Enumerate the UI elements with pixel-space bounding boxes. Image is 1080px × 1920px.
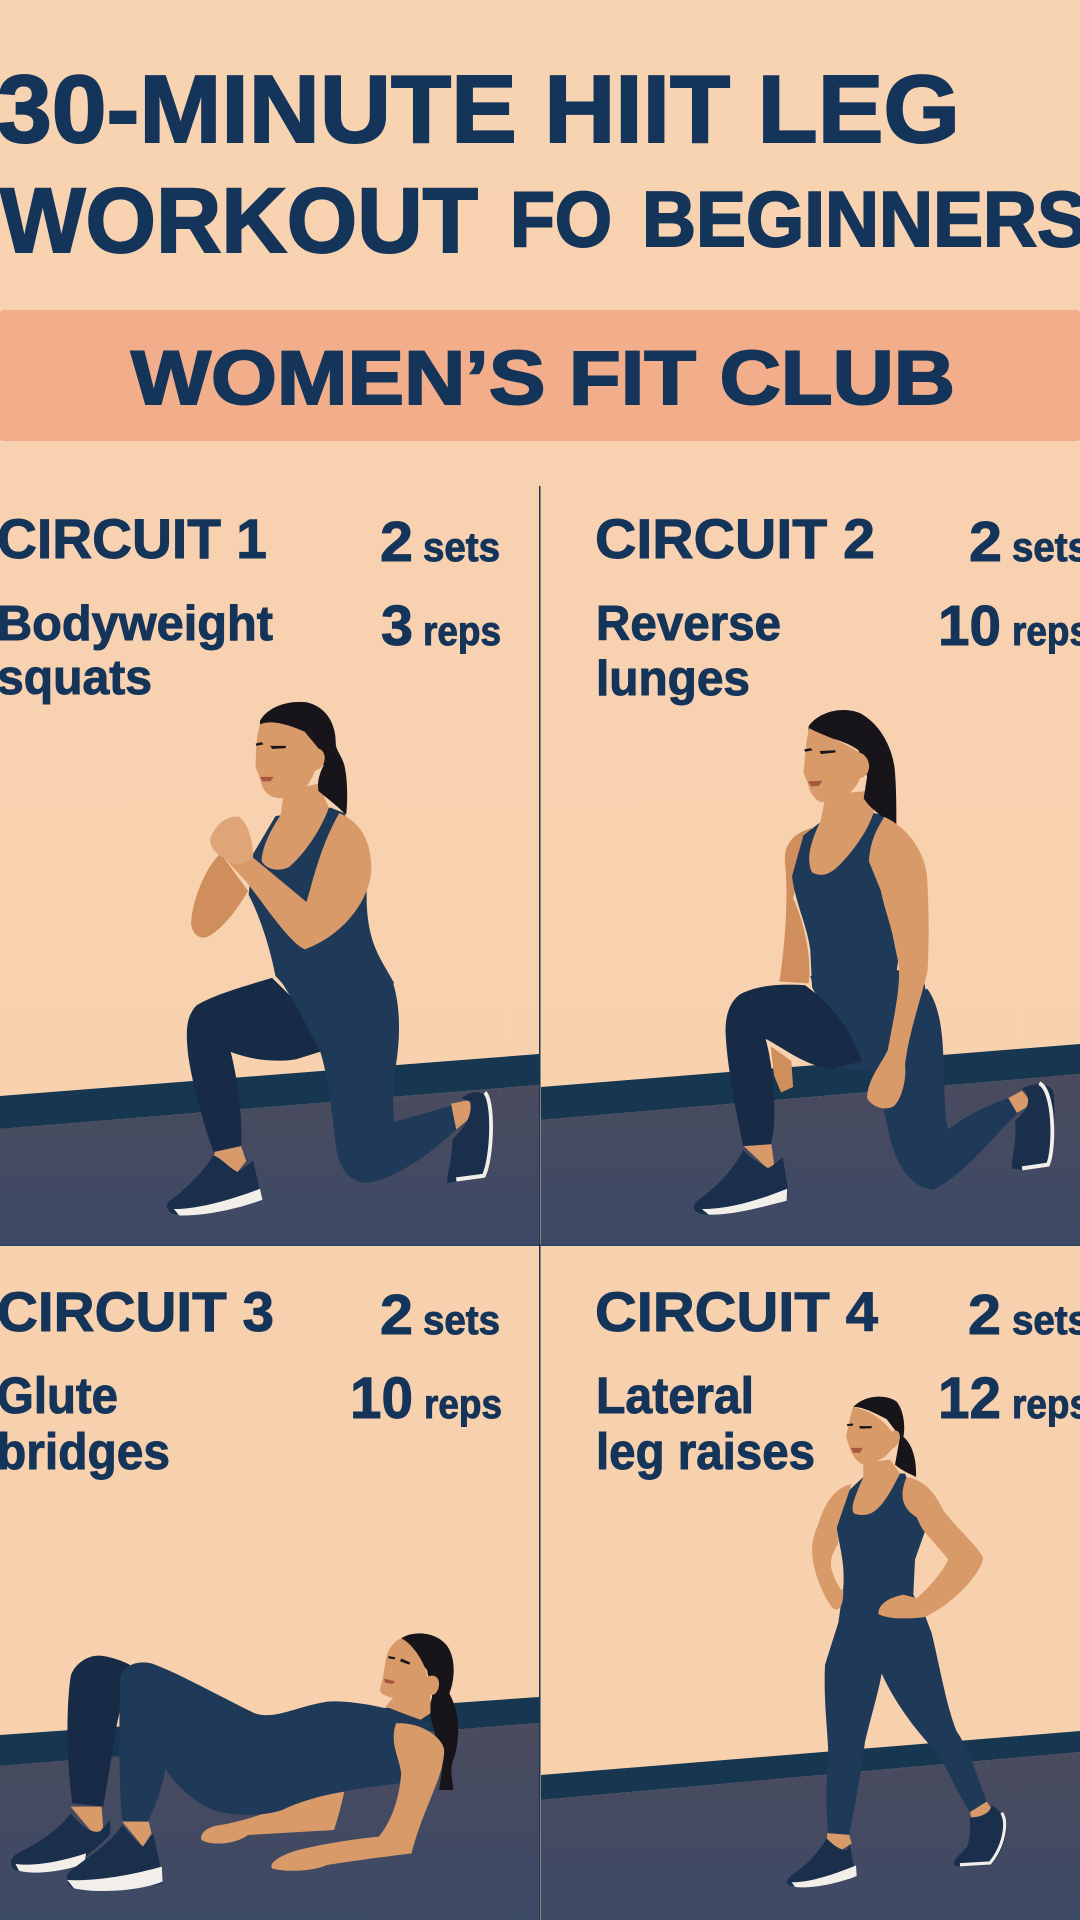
circuit 1 sets: 2 — [380, 510, 413, 574]
circuit 2 heading: CIRCUIT 2 — [595, 507, 875, 570]
circuit 1 reps: reps — [423, 608, 501, 654]
figure: lunge with clasped hands — [167, 702, 492, 1215]
figure: standing hands on hips — [787, 1397, 1007, 1887]
panel: circuit 1 — [0, 507, 539, 1245]
title: 30-MINUTE HIIT LEG — [0, 56, 960, 163]
panel: circuit 2 — [541, 507, 1080, 1245]
circuit 4 exercise name — [596, 1367, 815, 1480]
banner: Women's Fit Club — [0, 310, 1080, 441]
circuit 4 reps: 12 — [938, 1366, 1001, 1431]
circuit 3 exercise name — [0, 1367, 170, 1480]
circuit 1 exercise name: Bodyweight — [0, 597, 273, 651]
circuit 4 reps — [938, 1366, 1080, 1431]
circuit 3 exercise name: bridges — [0, 1423, 170, 1480]
figure: reverse lunge — [694, 710, 1055, 1215]
circuit 4 exercise name: leg raises — [596, 1423, 815, 1480]
figure: glute bridge — [11, 1633, 458, 1891]
panel: circuit 4 — [541, 1280, 1080, 1920]
circuit 4 sets — [968, 1283, 1080, 1347]
banner: Women's Fit Club: WOMEN’S FIT CLUB — [131, 336, 955, 421]
circuit 1 sets — [380, 510, 500, 574]
circuit 4 sets: 2 — [968, 1283, 1001, 1347]
circuit 3 exercise name: Glute — [0, 1367, 118, 1424]
circuit 3 sets: sets — [423, 1297, 500, 1343]
title: FO — [510, 175, 612, 263]
circuit 2 reps: 10 — [938, 594, 1001, 658]
circuit 2 reps — [938, 594, 1080, 658]
circuit 4 exercise name: Lateral — [596, 1367, 754, 1424]
circuit 3 sets — [380, 1283, 500, 1347]
title — [0, 56, 1080, 272]
circuit 2 sets: 2 — [969, 510, 1002, 574]
circuit 1 reps: 3 — [381, 594, 413, 658]
circuit 3 reps: 10 — [350, 1366, 413, 1431]
circuit 3 reps — [350, 1366, 502, 1431]
circuit 3 heading: CIRCUIT 3 — [0, 1280, 274, 1343]
title: WORKOUT — [0, 170, 478, 272]
circuit 3 reps: reps — [424, 1381, 502, 1427]
circuit 1 heading: CIRCUIT 1 — [0, 507, 267, 570]
circuit 2 exercise name: lunges — [596, 652, 750, 706]
circuit 4 heading: CIRCUIT 4 — [595, 1280, 878, 1343]
circuit 1 sets: sets — [423, 524, 500, 570]
panel: circuit 3 — [0, 1280, 539, 1920]
circuit 1 reps — [381, 594, 501, 658]
circuit 3 sets: 2 — [380, 1283, 413, 1347]
circuit 1 exercise name — [0, 597, 273, 705]
circuit 2 sets — [969, 510, 1080, 574]
circuit 1 exercise name: squats — [0, 651, 152, 705]
circuit 2 exercise name: Reverse — [596, 597, 781, 651]
circuit 2 exercise name — [596, 597, 781, 706]
